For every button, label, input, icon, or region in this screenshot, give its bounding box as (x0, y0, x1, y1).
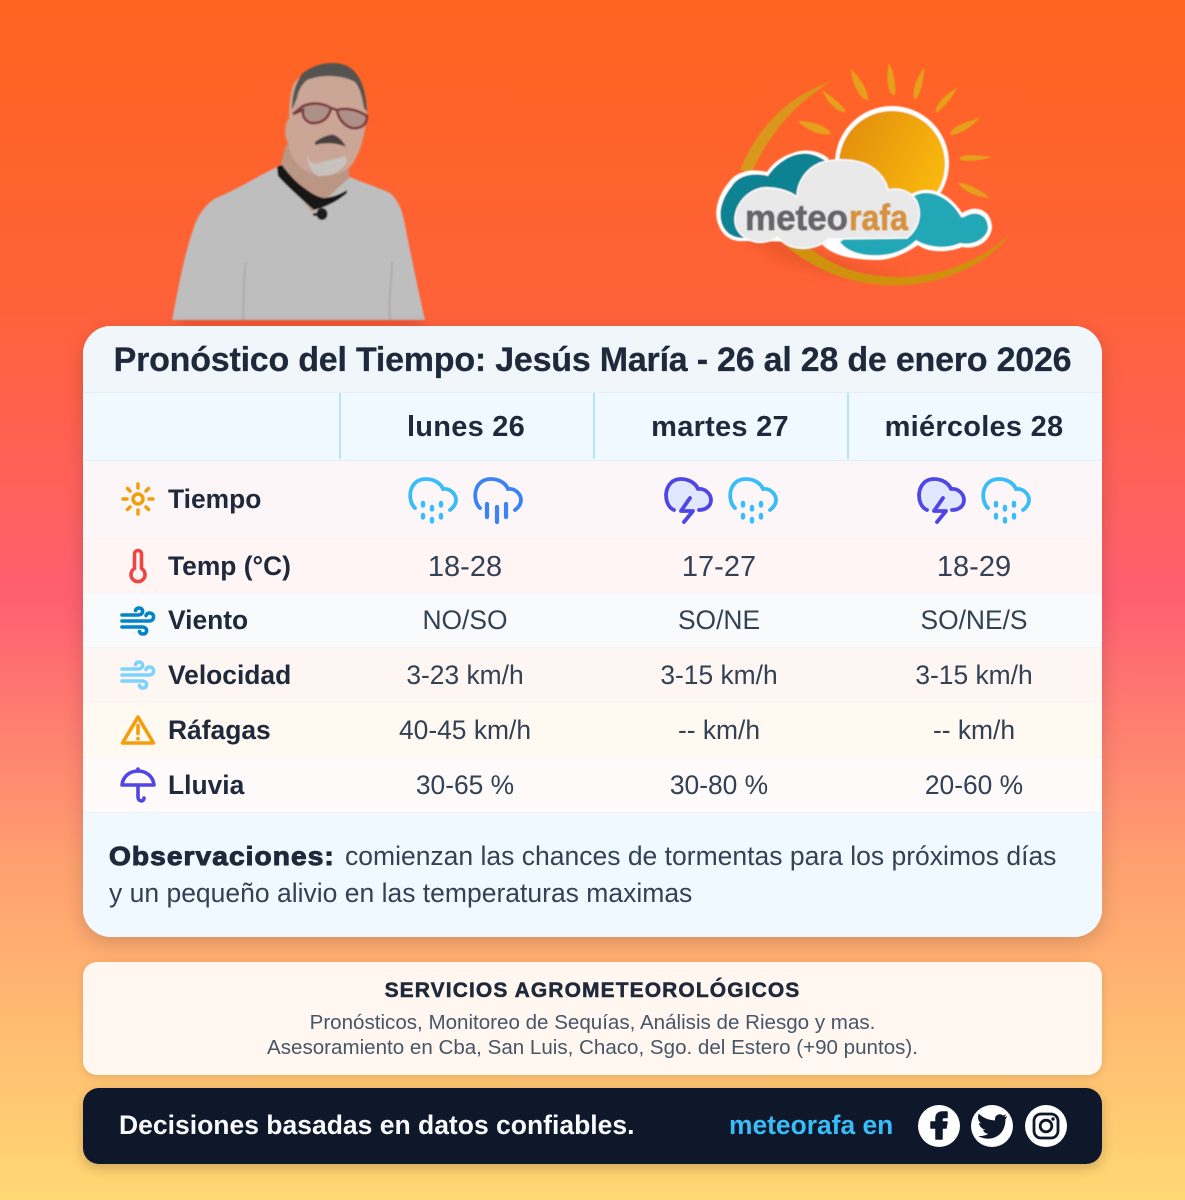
row: Lluvia: 30-80 % (670, 770, 768, 800)
icon: light rain (981, 477, 1031, 524)
row: Temp: 18-29 (937, 551, 1011, 583)
row: Ráfagas (83, 703, 1102, 758)
label: Tiempo: Tiempo (168, 484, 261, 514)
services text line 2: Asesoramiento en Cba, San Luis, Chaco, Sgo. del Estero (+90 puntos). (267, 1036, 918, 1059)
label: Lluvia: Lluvia (168, 770, 244, 800)
panel: footer (83, 1088, 1102, 1164)
icon: storm (664, 477, 713, 524)
row: Temp (83, 539, 1102, 594)
icon: twitter (971, 1105, 1013, 1147)
row: Velocidad (83, 648, 1102, 703)
values: rain chance: 30-65 % (416, 770, 514, 800)
footer slogan: Decisiones basadas en datos confiables. (119, 1110, 634, 1140)
icon: storm (917, 477, 966, 524)
day: miércoles: miércoles 28 (885, 411, 1063, 443)
label: Ráfagas: Ráfagas (168, 715, 271, 745)
day: martes: martes 27 (651, 411, 789, 443)
label: Viento: Viento (168, 605, 248, 635)
icon: wind speed (120, 660, 156, 690)
row: Tiempo (83, 461, 1102, 539)
observations text line 2: y un pequeño alivio en las temperaturas maximas (109, 878, 692, 908)
title band: Pronóstico del Tiempo: Jesús María - 26 al 28 de enero 2026 (114, 341, 1071, 379)
row: Velocidad: 3-15 km/h (660, 660, 778, 690)
icon: instagram (1025, 1105, 1067, 1147)
row: Viento (83, 594, 1102, 648)
row: Velocidad: 3-15 km/h (915, 660, 1033, 690)
row: Ráfagas: -- km/h (678, 715, 760, 745)
logo: meteorafa: rafa (849, 197, 909, 238)
icon: heavy rain (473, 477, 523, 524)
icon: sun (121, 482, 155, 516)
observations text: comienzan las chances de tormentas para los próximos días (345, 841, 1056, 871)
services text: Pronósticos, Monitoreo de Sequías, Análisis de Riesgo y mas. (310, 1011, 875, 1034)
title band (83, 326, 1102, 393)
row: Ráfagas: -- km/h (933, 715, 1015, 745)
logo: meteorafa (716, 63, 1010, 286)
services heading: SERVICIOS AGROMETEOROLÓGICOS (385, 979, 800, 1002)
icon: light rain (408, 477, 458, 524)
presenter photo (171, 62, 426, 326)
row: Viento: SO/NE (678, 605, 760, 635)
icon: warning (120, 715, 156, 745)
observations heading: Observaciones: (109, 841, 335, 871)
logo wordmark: meteo (745, 197, 848, 238)
footer brand: meteorafa en (729, 1110, 893, 1140)
row: Lluvia: 20-60 % (925, 770, 1023, 800)
values: temp: 18-28 (428, 551, 502, 583)
icon: wind (120, 606, 156, 636)
icon: umbrella (120, 767, 156, 803)
panel: services (83, 962, 1102, 1075)
table header (83, 393, 1102, 461)
icon: thermometer (129, 548, 147, 584)
panel: forecast card (83, 326, 1102, 937)
values: wind direction: NO/SO (422, 605, 508, 635)
label: Temp: Temp (°C) (168, 551, 291, 581)
icon: light rain (728, 477, 778, 524)
day: lunes: lunes 26 (407, 411, 525, 443)
values: speed: 3-23 km/h (406, 660, 524, 690)
row: Temp: 17-27 (682, 551, 756, 583)
row: Lluvia (83, 758, 1102, 813)
values: gusts: 40-45 km/h (399, 715, 531, 745)
observations (83, 813, 1102, 937)
icon: facebook (918, 1105, 960, 1147)
row: Viento: SO/NE/S (920, 605, 1028, 635)
label: Velocidad: Velocidad (168, 660, 291, 690)
